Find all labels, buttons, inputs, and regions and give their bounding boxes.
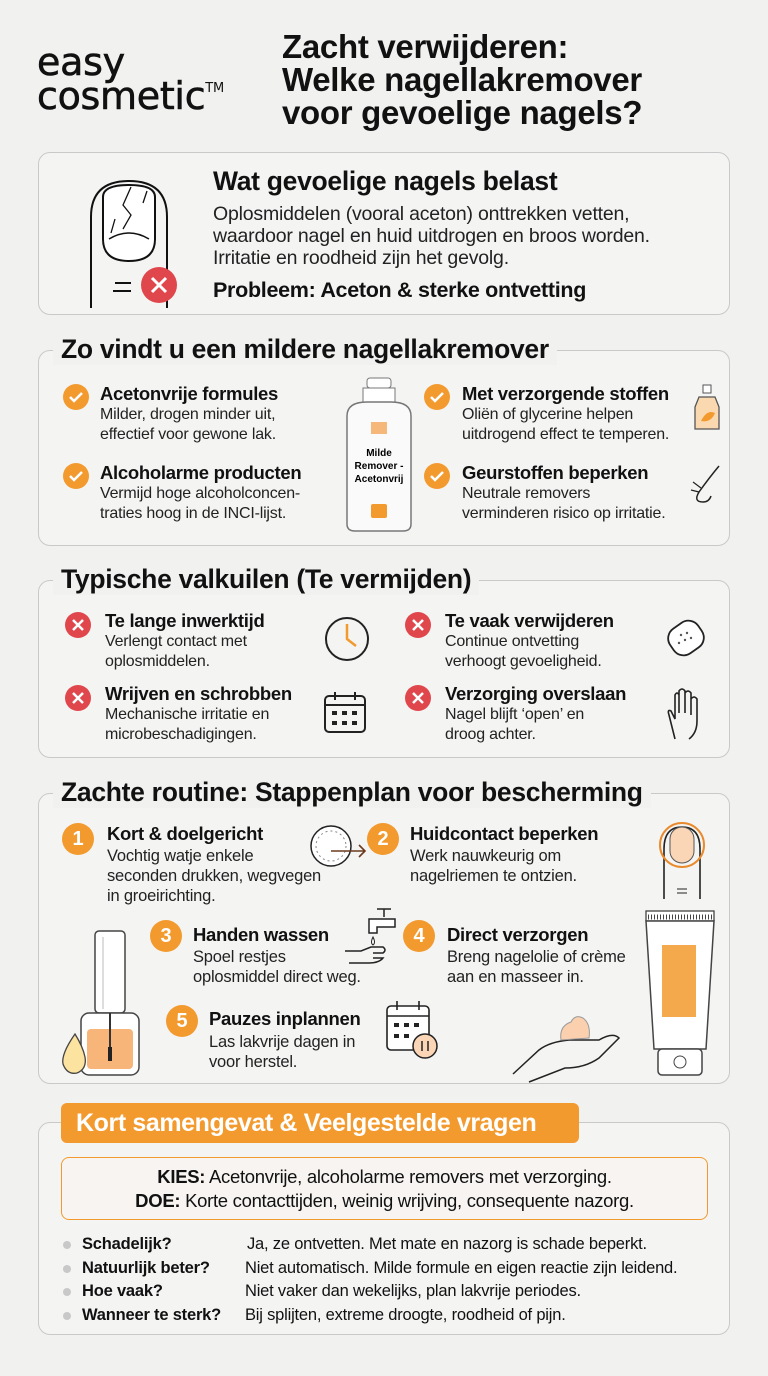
item: acetonvrij: Acetonvrije formules xyxy=(100,383,278,404)
step 2 xyxy=(367,822,705,899)
FAQ list: Schadelijk? xyxy=(82,1235,172,1253)
item: te vaak: verhoogt gevoeligheid. xyxy=(445,653,602,670)
item: verzorgend: Met verzorgende stoffen xyxy=(462,383,669,404)
panel: routine xyxy=(38,793,730,1084)
item: inwerktijd xyxy=(65,610,369,670)
key takeaways box: KIES: Acetonvrije, alcoholarme removers met verzorging. xyxy=(157,1166,612,1187)
item: te vaak xyxy=(405,610,705,670)
item: acetonvrij: effectief voor gewone lak. xyxy=(100,426,276,443)
step 1: Vochtig watje enkele xyxy=(107,847,253,865)
logo: cosmeticTM xyxy=(37,74,224,118)
item: inwerktijd: oplosmiddelen. xyxy=(105,653,210,670)
step 5 xyxy=(166,1001,438,1071)
step 3: Handen wassen xyxy=(193,924,329,945)
item: wrijven: Wrijven en schrobben xyxy=(105,683,292,704)
item: verzorging overslaan xyxy=(405,683,698,743)
title: Welke nagellakremover xyxy=(282,61,642,98)
step 2: Werk nauwkeurig om xyxy=(410,847,561,865)
item: alcoholarm xyxy=(63,462,301,522)
item: verzorgend: Oliën of glycerine helpen xyxy=(462,406,633,423)
item: alcoholarm: Alcoholarme producten xyxy=(100,462,301,483)
heading: Zachte routine: Stappenplan voor bescherming xyxy=(61,777,643,807)
body text: Irritatie en roodheid zijn het gevolg. xyxy=(213,247,509,269)
panel: problem xyxy=(38,152,730,315)
FAQ list: Wanneer te sterk? xyxy=(82,1306,221,1324)
step 4: 4 xyxy=(413,925,425,947)
item: geurstoffen: Geurstoffen beperken xyxy=(462,462,648,483)
panel: pitfalls xyxy=(38,580,730,758)
icon: hand with cream xyxy=(512,1016,620,1083)
item: acetonvrij: Milder, drogen minder uit, xyxy=(100,406,275,423)
item: te vaak: Te vaak verwijderen xyxy=(445,610,614,631)
step 4 xyxy=(403,920,626,986)
item: verzorging overslaan: droog achter. xyxy=(445,726,536,743)
heading banner xyxy=(61,1103,579,1143)
body text xyxy=(213,203,650,269)
icon: remover bottle: Remover - xyxy=(355,461,403,472)
key takeaways box xyxy=(61,1157,708,1220)
FAQ list: Ja, ze ontvetten. Met mate en nazorg is schade beperkt. xyxy=(247,1235,647,1253)
item: wrijven xyxy=(65,683,366,743)
item: geurstoffen xyxy=(424,462,720,522)
panel: summary & FAQ xyxy=(38,1122,730,1335)
item: verzorging overslaan: Nagel blijft ‘open’ en xyxy=(445,706,584,723)
icon: remover bottle: Acetonvrij xyxy=(355,474,404,485)
heading: Zo vindt u een mildere nagellakremover xyxy=(61,334,549,364)
icon: cream tube xyxy=(645,910,715,1076)
step 4: aan en masseer in. xyxy=(447,968,584,986)
step 3: oplosmiddel direct weg. xyxy=(193,968,361,986)
step 5: 5 xyxy=(176,1010,188,1032)
item: alcoholarm: traties hoog in de INCI-lijst. xyxy=(100,505,286,522)
step 2: Huidcontact beperken xyxy=(410,823,598,844)
heading banner: Kort samengevat & Veelgestelde vragen xyxy=(76,1109,536,1137)
key takeaways box: DOE: Korte contacttijden, weinig wrijving, consequente nazorg. xyxy=(135,1190,634,1211)
step 5: voor herstel. xyxy=(209,1053,297,1071)
item: verzorgend xyxy=(424,383,720,443)
icon: nail oil bottle xyxy=(62,930,140,1076)
step 1: Kort & doelgericht xyxy=(107,823,263,844)
FAQ list: Hoe vaak? xyxy=(82,1282,163,1300)
heading: Typische valkuilen (Te vermijden) xyxy=(61,564,471,594)
item: acetonvrij xyxy=(63,383,278,443)
problem statement: Probleem: Aceton & sterke ontvetting xyxy=(213,278,586,302)
step 5: Pauzes inplannen xyxy=(209,1008,360,1029)
step 1: 1 xyxy=(72,828,84,850)
step 3: 3 xyxy=(160,925,172,947)
item: verzorgend: uitdrogend effect te temperen. xyxy=(462,426,669,443)
item: wrijven: Mechanische irritatie en xyxy=(105,706,269,723)
item: inwerktijd: Te lange inwerktijd xyxy=(105,610,264,631)
logo xyxy=(37,40,224,118)
step 1 xyxy=(62,823,366,905)
item: geurstoffen: Neutrale removers xyxy=(462,485,590,502)
FAQ list: Niet automatisch. Milde formule en eigen reactie zijn leidend. xyxy=(245,1258,677,1276)
logo: easy xyxy=(37,40,125,84)
step 5: Las lakvrije dagen in xyxy=(209,1033,355,1051)
item: te vaak: Continue ontvetting xyxy=(445,633,579,650)
step 2: nagelriemen te ontzien. xyxy=(410,867,577,885)
item: alcoholarm: Vermijd hoge alcoholconcen- xyxy=(100,485,300,502)
step 4: Direct verzorgen xyxy=(447,924,588,945)
panel: milder remover xyxy=(38,350,730,546)
FAQ list xyxy=(63,1235,677,1324)
item: inwerktijd: Verlengt contact met xyxy=(105,633,247,650)
step 2: 2 xyxy=(377,828,389,850)
FAQ list: Bij splijten, extreme droogte, roodheid of pijn. xyxy=(245,1306,566,1324)
step 3: Spoel restjes xyxy=(193,948,286,966)
FAQ list: Niet vaker dan wekelijks, plan lakvrije periodes. xyxy=(245,1282,581,1300)
title: voor gevoelige nagels? xyxy=(282,94,642,131)
item: verzorging overslaan: Verzorging overslaan xyxy=(445,683,626,704)
step 3 xyxy=(150,908,396,986)
icon: remover bottle xyxy=(346,378,412,532)
body text: Oplosmiddelen (vooral aceton) onttrekken vetten, xyxy=(213,203,629,225)
item: geurstoffen: verminderen risico op irritatie. xyxy=(462,505,665,522)
title xyxy=(282,28,642,131)
FAQ list: Natuurlijk beter? xyxy=(82,1258,210,1276)
item: wrijven: microbeschadigingen. xyxy=(105,726,257,743)
step 1: seconden drukken, wegvegen xyxy=(107,867,321,885)
title: Zacht verwijderen: xyxy=(282,28,568,65)
icon: cracked nail with x xyxy=(90,180,177,308)
heading: Wat gevoelige nagels belast xyxy=(213,166,557,196)
step 1: in groeirichting. xyxy=(107,887,216,905)
body text: waardoor nagel en huid uitdrogen en broos worden. xyxy=(213,225,650,247)
step 4: Breng nagelolie of crème xyxy=(447,948,626,966)
icon: remover bottle: Milde xyxy=(366,448,392,459)
